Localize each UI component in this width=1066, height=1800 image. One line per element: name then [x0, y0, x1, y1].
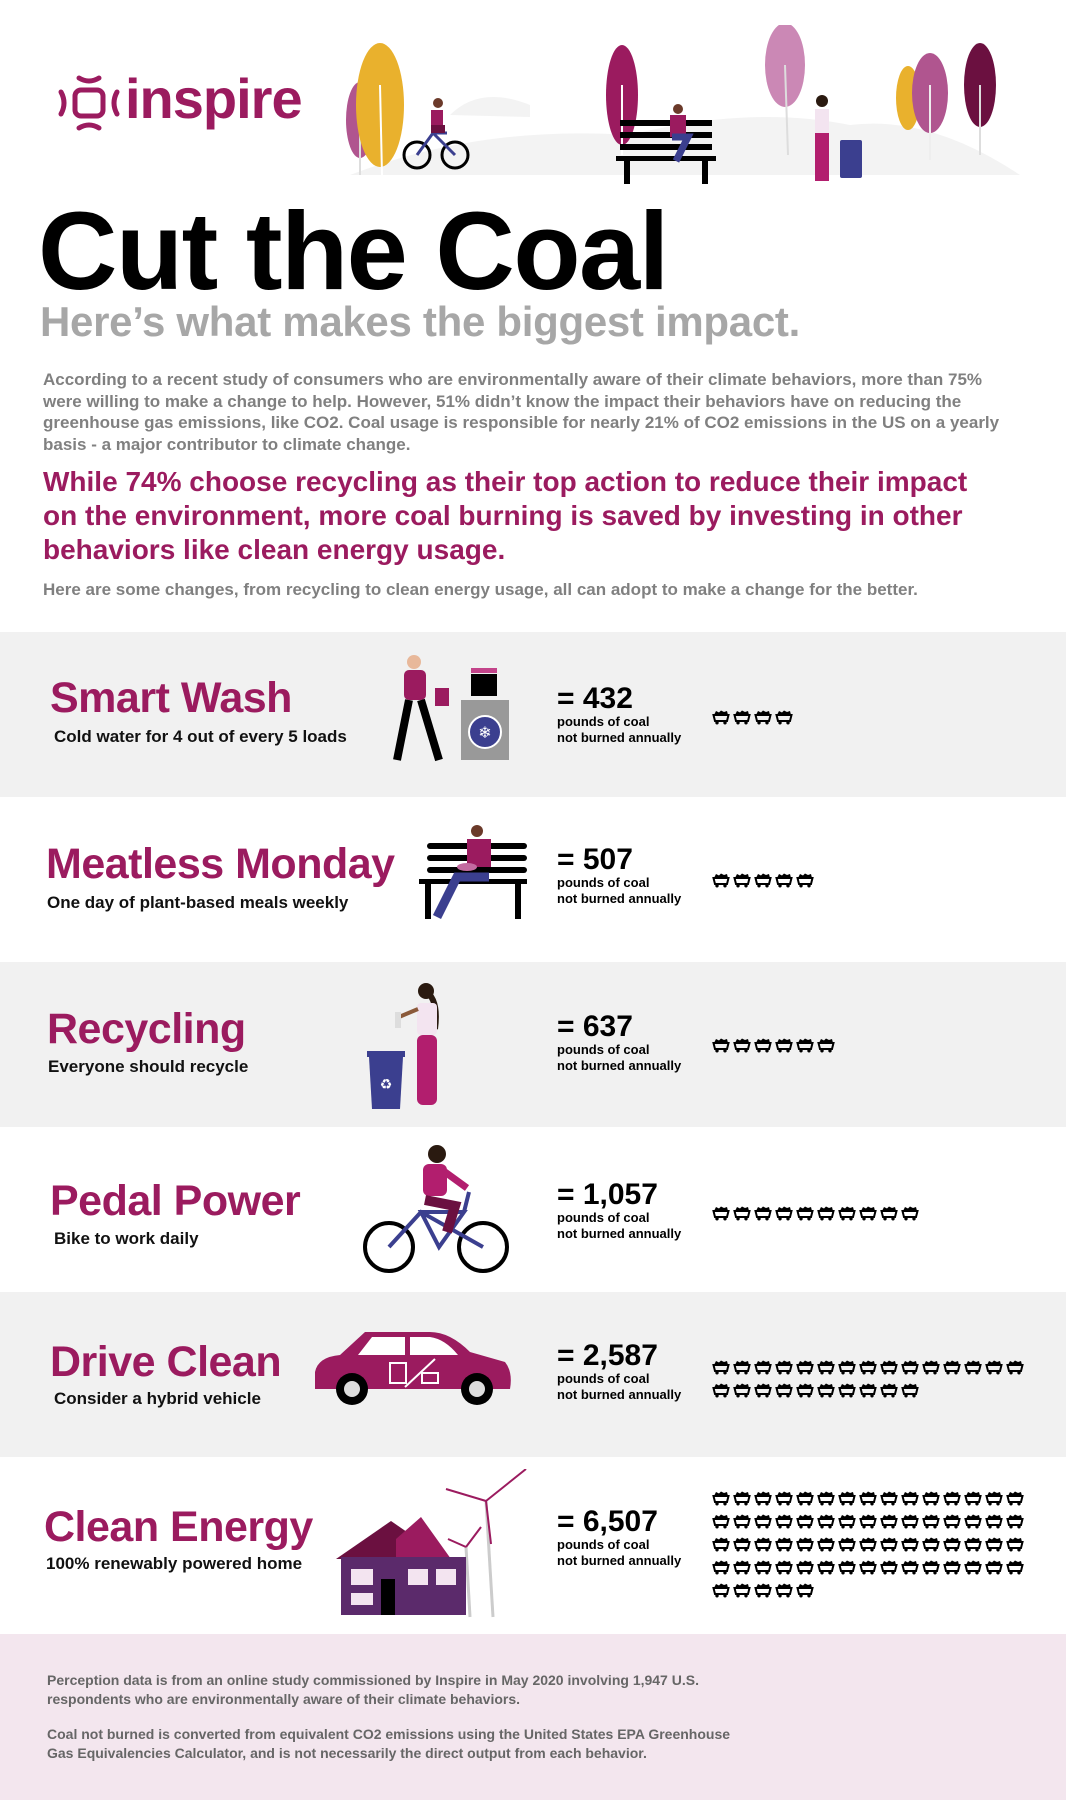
panel: Clean Energy: Clean Energy: [44, 1503, 313, 1551]
panel: Recycling: Everyone should recycle: [48, 1057, 248, 1076]
footer: sources: [0, 1634, 1066, 1800]
coal icons: 4: [712, 710, 793, 724]
stat: 6,507: [557, 1505, 682, 1568]
stat: 637: [557, 1010, 682, 1073]
stat: 507: [557, 843, 682, 906]
panel: Recycling: [0, 962, 1066, 1127]
stat: 507: = 507: [557, 843, 633, 876]
stat: 432: = 432: [557, 682, 633, 715]
stat: 1,057: pounds of coal: [557, 1210, 649, 1225]
panel: Meatless Monday: One day of plant-based meals weekly: [47, 893, 348, 912]
icon: house with wind turbines: [336, 1469, 527, 1618]
icon: man with washing machine: ❄: [478, 725, 492, 742]
intro paragraph: [43, 370, 999, 454]
coal icons: 6: [712, 1038, 835, 1052]
icon: cyclist: [363, 1145, 509, 1273]
stat: 2,587: not burned annually: [557, 1387, 681, 1402]
icon: man with washing machine: [393, 655, 509, 762]
stat: 2,587: [557, 1339, 682, 1402]
highlight statement: on the environment, more coal burning is saved by investing in other: [43, 500, 962, 531]
subtitle: Here’s what makes the biggest impact.: [40, 298, 800, 345]
intro paragraph: were willing to make a change to help. However, 51% didn’t know the impact their behaviors have on reducing the: [43, 392, 961, 410]
stat: 507: not burned annually: [557, 891, 681, 906]
stat: 432: pounds of coal: [557, 714, 649, 729]
intro paragraph: According to a recent study of consumers who are environmentally aware of their climate behaviors, more than 75%: [43, 370, 982, 389]
highlight statement: While 74% choose recycling as their top action to reduce their impact: [43, 466, 967, 497]
panel: Pedal Power: Bike to work daily: [54, 1229, 199, 1248]
coal icons: 65: [712, 1492, 1024, 1598]
footer: sources: Coal not burned is converted from equivalent CO2 emissions using the United States EPA Greenhouse: [47, 1726, 730, 1742]
panel: Pedal Power: Pedal Power: [50, 1177, 300, 1225]
footer: sources: respondents who are environmentally aware of their climate behaviors.: [47, 1691, 520, 1707]
stat: 6,507: not burned annually: [557, 1553, 681, 1568]
panel: Meatless Monday: Meatless Monday: [46, 840, 395, 888]
stat: 432: [557, 682, 682, 745]
icon: woman recycling: [367, 983, 439, 1109]
coal icons: 10: [712, 1206, 919, 1220]
panel: Drive Clean: [0, 1292, 1066, 1457]
stat: 1,057: [557, 1178, 682, 1241]
coal icons: 5: [712, 874, 814, 888]
panel: Smart Wash: Cold water for 4 out of every 5 loads: [54, 727, 347, 746]
header illustration: park scene: [346, 25, 1020, 184]
panel: Clean Energy: [44, 1469, 1024, 1618]
stat: 637: pounds of coal: [557, 1042, 649, 1057]
stat: 6,507: pounds of coal: [557, 1537, 649, 1552]
stat: 432: not burned annually: [557, 730, 681, 745]
intro paragraph: greenhouse gas emissions, like CO2. Coal usage is responsible for nearly 21% of CO2 emissions in the US on a yearly: [43, 413, 999, 432]
highlight statement: behaviors like clean energy usage.: [43, 534, 505, 565]
coal icons: 25: [712, 1360, 1024, 1398]
title: Cut the Coal: [38, 190, 668, 313]
panel: Drive Clean: Consider a hybrid vehicle: [54, 1389, 261, 1408]
highlight statement: [43, 466, 967, 565]
stat: 6,507: = 6,507: [557, 1505, 658, 1538]
panel: Recycling: Recycling: [47, 1005, 246, 1053]
panel: Smart Wash: Smart Wash: [50, 674, 292, 722]
panel: Pedal Power: [50, 1145, 919, 1273]
stat: 2,587: pounds of coal: [557, 1371, 649, 1386]
panel: Smart Wash: [0, 632, 1066, 797]
stat: 507: pounds of coal: [557, 875, 649, 890]
footer: sources: Gas Equivalencies Calculator, and is not necessarily the direct output from each behavior.: [47, 1745, 647, 1761]
stat: 1,057: not burned annually: [557, 1226, 681, 1241]
footer: sources: Perception data is from an online study commissioned by Inspire in May 2020 involving 1,947 U.S.: [47, 1672, 699, 1688]
lead-in line: Here are some changes, from recycling to clean energy usage, all can adopt to make a change for the better.: [43, 580, 918, 599]
stat: 1,057: = 1,057: [557, 1178, 658, 1211]
logo: inspire: inspire: [125, 67, 302, 130]
intro paragraph: basis - a major contributor to climate change.: [43, 434, 410, 454]
stat: 2,587: = 2,587: [557, 1339, 658, 1372]
panel: Clean Energy: 100% renewably powered home: [46, 1554, 302, 1573]
icon: man on bench: [419, 825, 527, 919]
stat: 637: not burned annually: [557, 1058, 681, 1073]
panel: Meatless Monday: [46, 825, 814, 919]
icon: hybrid car: [315, 1332, 511, 1405]
panel: Drive Clean: Drive Clean: [50, 1338, 281, 1386]
stat: 637: = 637: [557, 1010, 633, 1043]
icon: woman recycling: ♻: [380, 1076, 392, 1092]
